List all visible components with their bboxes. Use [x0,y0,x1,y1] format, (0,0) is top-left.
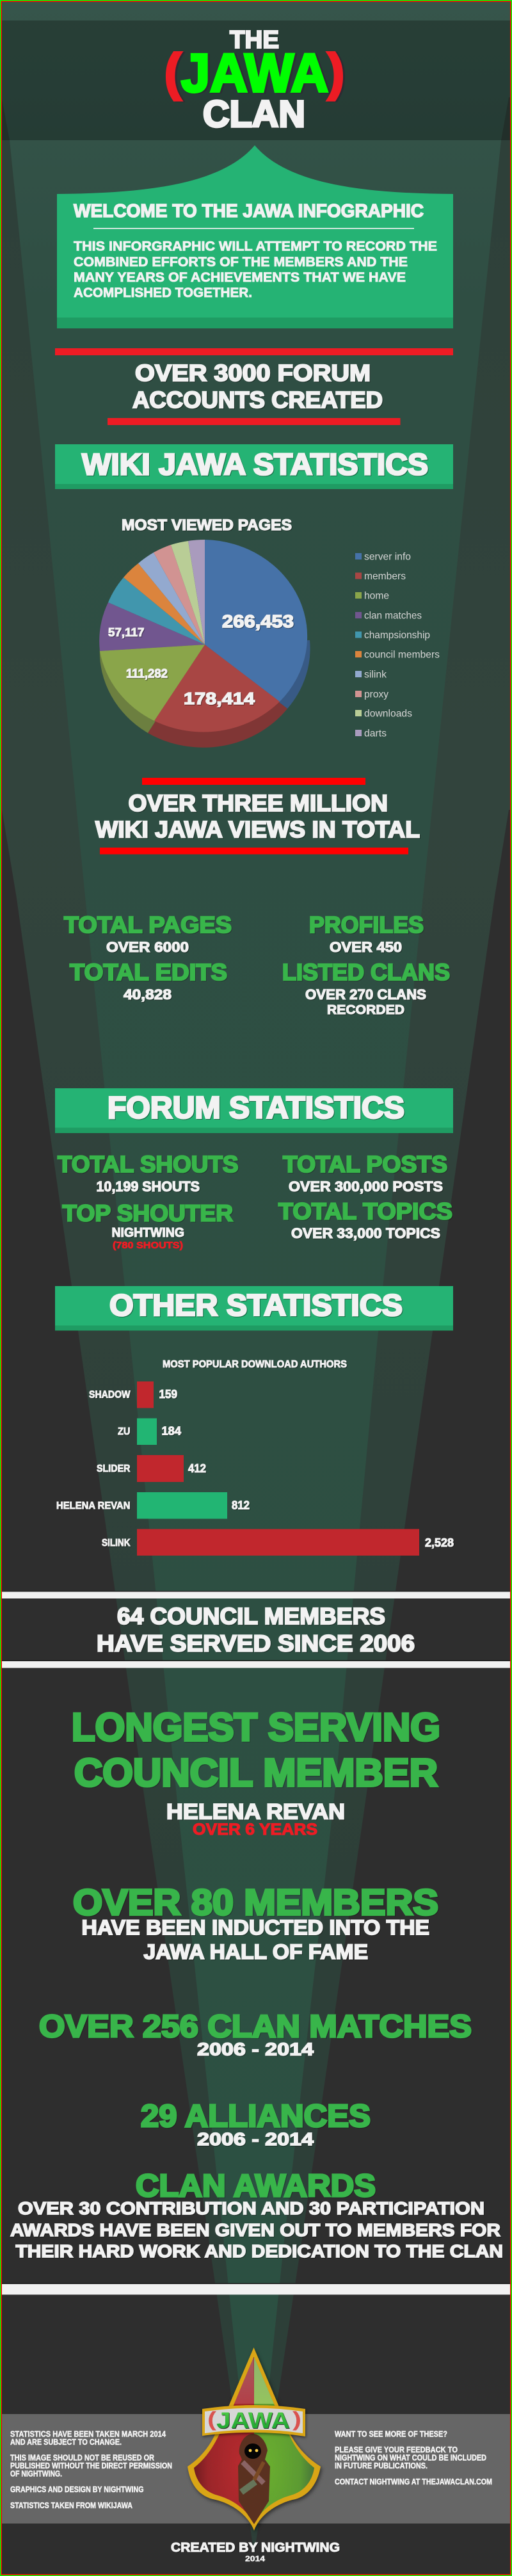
credit [171,2541,340,2563]
footer text: right: PLEASE GIVE YOUR FEEDBACK TO [335,2445,458,2454]
alliances [141,2099,371,2149]
legend: champsionship [364,630,430,641]
council members section: HAVE SERVED SINCE 2006 [97,1630,415,1657]
welcome heading: WELCOME TO THE JAWA INFOGRAPHIC [74,201,424,221]
bar: shadow: SHADOW [89,1389,131,1401]
stat: top shouter: NIGHTWING [111,1226,184,1240]
legend: clan matches [364,611,422,621]
alliances: 2006 - 2014 [197,2129,314,2149]
clan awards [10,2169,503,2261]
stat: total posts: TOTAL POSTS [283,1151,447,1177]
title: CLAN [203,93,305,135]
footer text: left [10,2430,172,2510]
clan awards: AWARDS HAVE BEEN GIVEN OUT TO MEMBERS FOR [10,2220,500,2240]
footer text: left: GRAPHICS AND DESIGN BY NIGHTWING [10,2485,143,2494]
header band [0,20,512,140]
legend: server info [364,552,411,562]
footer text: left: OF NIGHTWING. [10,2470,62,2479]
bar: helena revan: 812 [232,1499,250,1512]
bar: zu [118,1419,181,1445]
legend: home [364,590,389,602]
jawa banner: ) [292,2408,301,2431]
council members section: 64 COUNCIL MEMBERS [117,1603,385,1629]
stat: listed clans [282,959,450,1017]
footer text: right: WANT TO SEE MORE OF THESE? [335,2430,447,2439]
stat: total edits: 40,828 [124,986,172,1002]
legend: proxy [364,689,388,700]
legend: silink [364,670,387,680]
footer text: left: STATISTICS TAKEN FROM WIKIJAWA [10,2501,132,2510]
bar: slider [97,1455,206,1482]
bar: shadow: 159 [159,1388,177,1401]
stat: total pages [64,912,232,955]
title: ( [164,44,181,101]
footer text: left: THIS IMAGE SHOULD NOT BE REUSED OR [10,2453,154,2462]
stat: profiles: PROFILES [309,912,424,938]
stat: profiles [309,912,424,955]
forum stats [58,1151,452,1251]
jawa figure [238,2434,270,2524]
banner: wiki jawa statistics: WIKI JAWA STATISTICS [82,447,428,481]
stat: total shouts: TOTAL SHOUTS [58,1151,238,1177]
welcome text: ACOMPLISHED TOGETHER. [74,286,252,300]
title: ) [328,44,344,101]
callout: forum accounts: ACCOUNTS CREATED [132,387,383,413]
jawa banner [202,2405,305,2436]
callout: wiki views: WIKI JAWA VIEWS IN TOTAL [95,816,420,842]
bar: shadow [89,1381,177,1408]
stat: top shouter [63,1200,233,1251]
jawa banner: ( [207,2408,216,2431]
footer text: right: IN FUTURE PUBLICATIONS. [335,2461,428,2470]
hall of fame [73,1882,438,1963]
footer text: left: AND ARE SUBJECT TO CHANGE. [10,2438,122,2447]
stat: total posts: OVER 300,000 POSTS [289,1179,443,1195]
alliances: 29 ALLIANCES [141,2099,371,2134]
pie chart: most viewed pages [99,517,440,748]
pie labels: 266,453 [222,611,294,631]
title: THE [230,26,279,54]
pie labels: 178,414 [184,689,255,708]
chart title: MOST VIEWED PAGES [122,517,292,534]
footer text: left: STATISTICS HAVE BEEN TAKEN MARCH 2014 [10,2430,166,2439]
hall of fame: HAVE BEEN INDUCTED INTO THE [82,1916,429,1939]
stat: top shouter: TOP SHOUTER [63,1200,233,1227]
callout: forum accounts [55,348,453,425]
banner: wiki jawa statistics [55,444,453,489]
longest serving council member: OVER 6 YEARS [193,1821,317,1839]
callout: wiki views [95,778,420,854]
stat: listed clans: OVER 270 CLANS [305,986,426,1002]
longest serving council member: COUNCIL MEMBER [74,1751,438,1794]
clan matches: 2006 - 2014 [197,2040,314,2059]
council members section [2,1591,510,1668]
welcome text: THIS INFORGRAPHIC WILL ATTEMPT TO RECORD THE [74,239,437,254]
welcome text: COMBINED EFFORTS OF THE MEMBERS AND THE [74,255,408,270]
pie labels: 111,282 [126,667,168,681]
banner: forum statistics [55,1088,453,1133]
pie labels: 57,117 [108,626,145,639]
clan awards: OVER 30 CONTRIBUTION AND 30 PARTICIPATION [18,2198,484,2218]
stat: total shouts: 10,199 SHOUTS [96,1179,200,1195]
stat: total posts [283,1151,447,1195]
hall of fame: JAWA HALL OF FAME [143,1940,368,1963]
title [164,26,344,135]
footer text: right: NIGHTWING ON WHAT COULD BE INCLUDED [335,2453,486,2462]
stat: total edits [70,959,227,1002]
jawa banner: JAWA [216,2408,290,2433]
pie labels [108,611,294,708]
bar: silink: SILINK [102,1538,131,1549]
banner: forum statistics: FORUM STATISTICS [108,1091,404,1125]
legend: downloads [364,708,412,720]
banner: other statistics [55,1286,453,1330]
welcome text: MANY YEARS OF ACHIEVEMENTS THAT WE HAVE [74,270,406,285]
pie [99,540,310,748]
bar: zu: ZU [118,1426,131,1437]
title: JAWA [181,43,328,103]
banner: other statistics: OTHER STATISTICS [109,1288,403,1322]
bar: helena revan [56,1492,250,1518]
stat: total pages: OVER 6000 [106,939,189,955]
panel: welcome [57,145,453,328]
hall of fame: OVER 80 MEMBERS [73,1882,438,1923]
stat: total topics [278,1198,452,1241]
stat: top shouter: (780 SHOUTS) [113,1240,183,1251]
longest serving council member [72,1705,440,1839]
longest serving council member: HELENA REVAN [166,1800,345,1824]
legend [355,552,440,739]
stat: profiles: OVER 450 [330,939,402,955]
bar: silink [102,1529,454,1556]
clan matches [39,2009,472,2059]
icon: jawa crest [188,2347,321,2531]
callout: forum accounts: OVER 3000 FORUM [135,360,371,386]
bar: helena revan: HELENA REVAN [56,1501,131,1511]
stat: total shouts [58,1151,238,1195]
bar: slider: 412 [188,1462,206,1475]
stat: listed clans: RECORDED [327,1003,404,1017]
longest serving council member: LONGEST SERVING [72,1705,440,1749]
footer text: left: PUBLISHED WITHOUT THE DIRECT PERMISSION [10,2461,172,2470]
clan matches: OVER 256 CLAN MATCHES [39,2009,472,2044]
legend: council members [364,649,440,661]
clan awards: CLAN AWARDS [136,2169,376,2203]
credit: CREATED BY NIGHTWING [171,2541,340,2555]
legend: darts [364,729,387,739]
welcome text [74,239,437,300]
chart title: MOST POPULAR DOWNLOAD AUTHORS [163,1359,347,1370]
clan awards: THEIR HARD WORK AND DEDICATION TO THE CLAN [15,2241,503,2261]
callout: wiki views: OVER THREE MILLION [128,790,388,816]
stat: total topics: TOTAL TOPICS [278,1198,452,1224]
stat: total pages: TOTAL PAGES [64,912,232,938]
legend: members [364,571,406,582]
wiki stats [64,912,450,1017]
credit: 2014 [245,2556,266,2563]
stat: total edits: TOTAL EDITS [70,959,227,985]
bar: zu: 184 [161,1425,181,1438]
bar: slider: SLIDER [97,1463,131,1474]
stat: listed clans: LISTED CLANS [282,959,450,985]
footer band [0,2414,512,2524]
bar: silink: 2,528 [425,1536,454,1549]
bar chart: most popular download authors [56,1359,454,1556]
footer text: right [335,2430,492,2486]
stat: total topics: OVER 33,000 TOPICS [291,1225,440,1241]
